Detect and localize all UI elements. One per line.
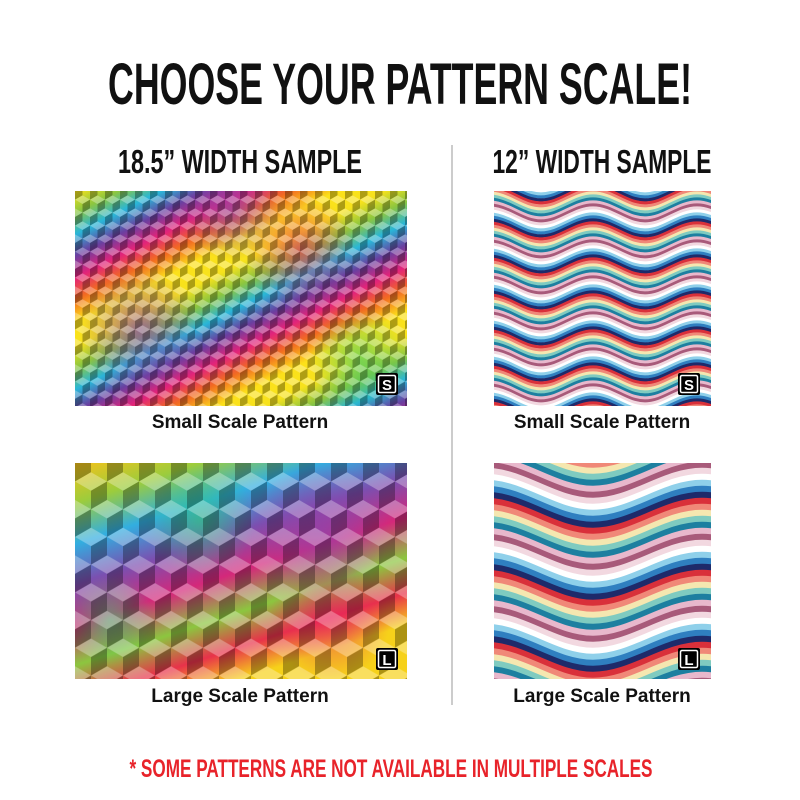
badge S: S — [684, 377, 694, 394]
panel: small cube pattern — [75, 191, 407, 406]
caption: large scale pattern left: Large Scale Pattern — [151, 686, 329, 707]
caption: small scale pattern right: Small Scale Pattern — [514, 412, 690, 433]
badge L: L — [382, 652, 392, 669]
badge L — [678, 648, 700, 670]
badge L: L — [684, 652, 694, 669]
badge S: S — [382, 377, 392, 394]
panel: small wave pattern — [494, 191, 711, 406]
badge L — [376, 648, 398, 670]
heading: 18.5 width sample: 18.5” WIDTH SAMPLE — [118, 143, 362, 180]
badge S — [678, 373, 700, 395]
caption: large scale pattern right: Large Scale Pattern — [513, 686, 691, 707]
panel: large wave pattern — [494, 463, 711, 679]
badge S — [376, 373, 398, 395]
caption: small scale pattern left: Small Scale Pattern — [152, 412, 328, 433]
panel: large cube pattern — [65, 460, 407, 680]
